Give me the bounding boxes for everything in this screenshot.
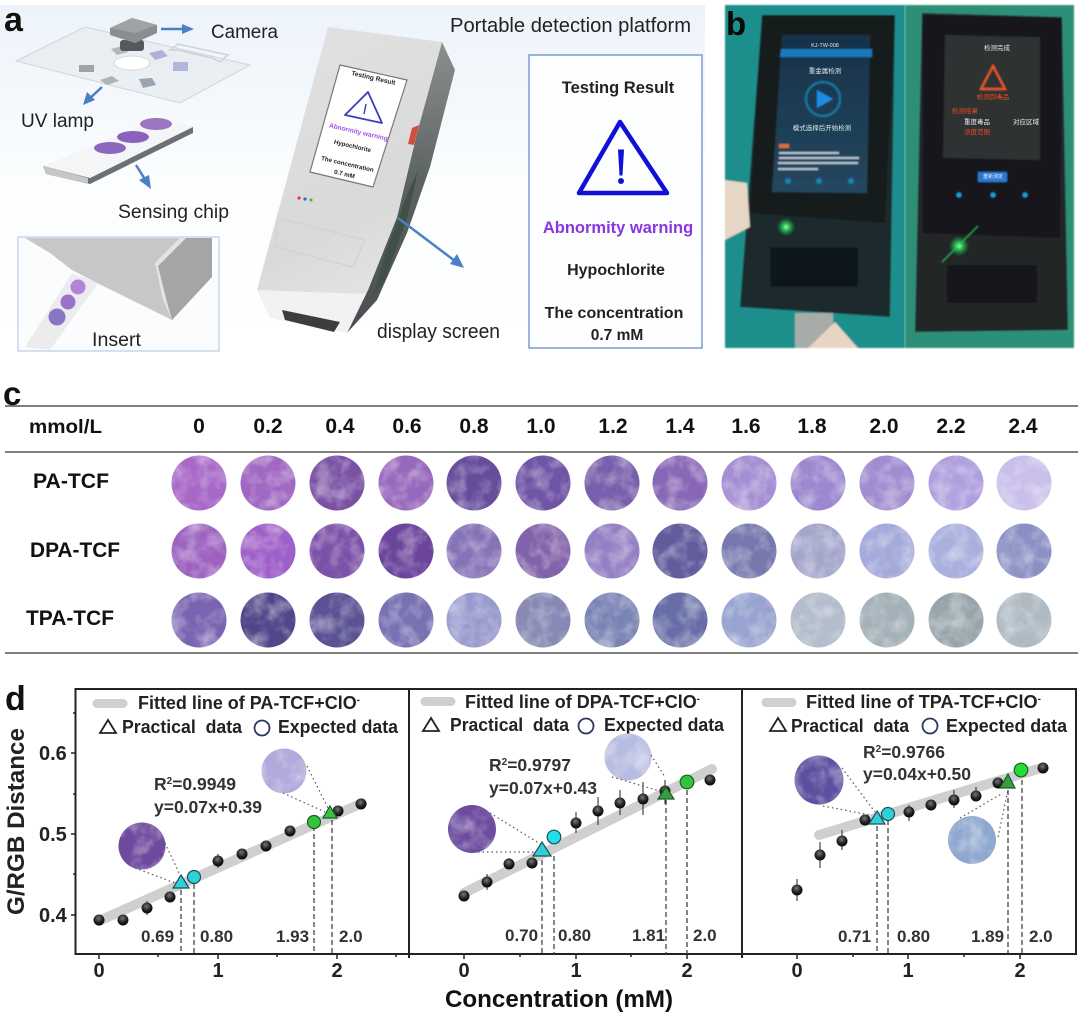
header row: 0.2 [253, 415, 283, 438]
concentration: The concentration [545, 305, 683, 322]
photo: device ready screen [725, 5, 905, 348]
screen text: 对应区域 [1013, 117, 1040, 126]
sample swatches [794, 756, 1008, 864]
sample swatches [448, 734, 665, 853]
label: display screen: display screen [377, 321, 500, 343]
screen text: 重度毒品 [964, 117, 990, 126]
equation: y=0.07x+0.43 [489, 778, 597, 798]
dashed guides and values: 0.80 [558, 926, 591, 945]
label: insert: Insert [92, 330, 142, 351]
dashed guides and values: 1.93 [276, 927, 309, 946]
concentration value: 0.7 mM [591, 327, 643, 344]
dashed guides and values: 2.0 [693, 926, 717, 945]
practical and expected markers [533, 775, 694, 856]
result title: Testing Result [562, 79, 675, 97]
arrow: display screen [398, 218, 464, 268]
hypochlorite: Hypochlorite [567, 262, 665, 279]
chart: PA-TCF [94, 693, 399, 954]
chart: TPA-TCF [766, 692, 1068, 954]
dashed guides and values: 2.0 [1029, 927, 1053, 946]
screen text: 检测结果 [952, 106, 978, 115]
label: UV lamp: UV lamp [21, 111, 94, 132]
equation: y=0.04x+0.50 [863, 764, 971, 784]
dashed guides and values: 1.81 [632, 926, 665, 945]
equation: =0.9766 [881, 742, 945, 762]
chart frames and ticks [71, 689, 1076, 959]
legend: Expected data [604, 715, 725, 735]
y axis labels: 0.4 [39, 905, 68, 927]
y axis labels [39, 743, 68, 927]
fitted line [99, 803, 362, 921]
x axis labels: 1 [212, 960, 224, 982]
equation: R [863, 742, 876, 762]
dashed guides and values: 0.80 [200, 927, 233, 946]
x axis labels: 2 [1014, 960, 1026, 982]
equation: =0.9797 [507, 755, 571, 775]
x axis labels [93, 960, 1026, 982]
legend: Expected data [278, 717, 399, 737]
y axis labels: 0.5 [39, 824, 67, 846]
label: portable detection platform: Portable detection platform [450, 15, 691, 37]
panel a: portable detection platform [0, 1, 705, 351]
header row: 1.8 [797, 415, 827, 438]
device screen: Testing Result [351, 70, 397, 87]
header row: 0.6 [392, 415, 422, 438]
legend: Fitted line of DPA-TCF+ClO [465, 692, 697, 712]
screen text: 重金属检测 [809, 66, 842, 75]
row: DPA-TCF: DPA-TCF [30, 539, 120, 562]
header row: 2.4 [1008, 415, 1038, 438]
equation [154, 774, 262, 817]
practical and expected markers [173, 806, 337, 888]
panel d: calibration charts [3, 680, 1076, 1013]
sample swatches [118, 748, 328, 883]
x axis title: Concentration (mM) [445, 986, 673, 1013]
x axis labels: 2 [331, 960, 343, 982]
row: TPA-TCF [26, 592, 1052, 648]
panel letter c: c [3, 375, 21, 412]
x axis labels: 2 [681, 960, 693, 982]
dashed guides and values: 1.89 [971, 927, 1004, 946]
sensing chip [43, 116, 193, 184]
row: PA-TCF: PA-TCF [33, 470, 109, 493]
data points [458, 774, 716, 902]
screen text [952, 43, 1040, 180]
equation: 2 [876, 744, 882, 755]
testing result box [529, 55, 702, 348]
dashed guides and values: 2.0 [339, 927, 363, 946]
row: TPA-TCF: TPA-TCF [26, 607, 114, 630]
legend: Practical data [122, 717, 243, 737]
header row: 1.6 [731, 415, 761, 438]
practical and expected markers [869, 763, 1028, 824]
device screen: 0.7 mM [333, 169, 355, 180]
equation: =0.9949 [172, 774, 236, 794]
equation: R [154, 774, 167, 794]
handheld detection device [257, 27, 455, 333]
dashed guides and values [838, 780, 1053, 954]
panel letter d: d [5, 680, 26, 718]
arrow: sensing chip [136, 165, 151, 189]
data points [94, 798, 366, 926]
screen text: KJ-TW-008 [811, 43, 839, 49]
dashed guides and values [141, 820, 363, 954]
panel c: colour response table [3, 375, 1078, 653]
device screen: Abnormity warning [328, 122, 388, 143]
x axis labels: 0 [93, 960, 105, 982]
x axis labels: 0 [458, 960, 470, 982]
x axis labels: 0 [791, 960, 803, 982]
screen text [793, 43, 852, 132]
equation [863, 742, 971, 784]
header row [29, 415, 1038, 438]
dashed guides and values: 0.70 [505, 926, 538, 945]
legend: Practical data [450, 715, 570, 735]
legend: - [357, 695, 360, 706]
equation: y=0.07x+0.39 [154, 797, 262, 817]
header row: 1.2 [598, 415, 628, 438]
device screen: Hypochlorite [333, 139, 372, 154]
header row: 0 [193, 415, 205, 438]
header row: 1.4 [665, 415, 695, 438]
row: DPA-TCF [30, 524, 1052, 578]
screen text: 浓度范围 [964, 127, 990, 136]
chart: DPA-TCF [423, 692, 725, 954]
row: PA-TCF [33, 456, 1052, 510]
abnormity warning: Abnormity warning [543, 219, 693, 237]
legend: Practical data [791, 716, 910, 736]
fitted line [464, 769, 712, 893]
photo: warning result screen [905, 5, 1074, 348]
legend: - [1038, 694, 1041, 705]
equation: 2 [167, 776, 173, 787]
device screen [310, 65, 407, 187]
header row: 2.2 [936, 415, 966, 438]
header row: mmol/L [29, 417, 102, 438]
label: camera: Camera [211, 22, 278, 43]
legend [423, 692, 725, 735]
screen text: 模式选择后开始检测 [793, 123, 852, 132]
x axis labels: 1 [902, 960, 914, 982]
arrow: UV lamp [83, 87, 102, 105]
inset: insert chip [18, 237, 219, 351]
screen text: 检测完成 [984, 43, 1010, 52]
data points [792, 762, 1048, 901]
legend: Fitted line of TPA-TCF+ClO [806, 692, 1036, 712]
legend: Expected data [946, 716, 1068, 736]
equation: R [489, 755, 502, 775]
y axis title: G/RGB Distance [3, 728, 30, 915]
header row: 0.4 [325, 415, 355, 438]
panel b: device photographs [725, 5, 1074, 348]
y axis labels: 0.6 [39, 743, 67, 765]
dashed guides and values: 0.69 [141, 927, 174, 946]
camera and UV lamp plate [16, 18, 250, 103]
equation [489, 755, 597, 798]
fitted line [819, 768, 1041, 835]
equation: 2 [502, 757, 508, 768]
panel letter b: b [726, 5, 746, 42]
legend: - [697, 694, 700, 705]
warning triangle icon [579, 122, 667, 193]
legend [766, 692, 1068, 736]
x axis labels: 1 [570, 960, 582, 982]
dashed guides and values: 0.80 [897, 927, 930, 946]
panel letter a: a [4, 1, 24, 39]
label: sensing chip: Sensing chip [118, 202, 229, 223]
header row: 1.0 [526, 415, 556, 438]
legend: Fitted line of PA-TCF+ClO [138, 693, 357, 713]
device screen: The concentration [320, 155, 374, 174]
screen text: 重新测定 [983, 173, 1003, 180]
arrow: camera [161, 24, 194, 34]
legend [97, 693, 399, 737]
header row: 0.8 [459, 415, 489, 438]
screen text: 检测到毒品 [977, 92, 1009, 101]
header row: 2.0 [869, 415, 899, 438]
dashed guides and values [505, 790, 717, 954]
dashed guides and values: 0.71 [838, 927, 871, 946]
